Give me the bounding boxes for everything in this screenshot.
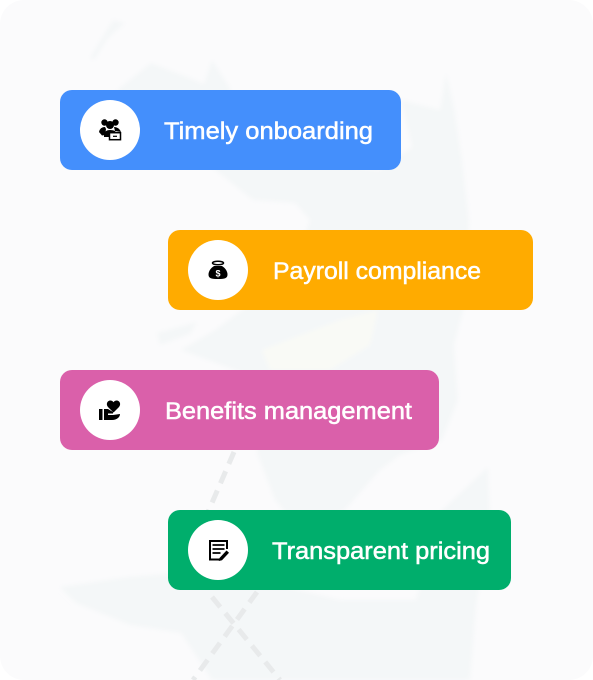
icon: hand holding heart bbox=[99, 400, 120, 420]
icon: money bag bbox=[208, 261, 228, 279]
card: Timely onboarding bbox=[60, 90, 401, 170]
faint map background bbox=[60, 20, 490, 680]
icon: money bag: $ bbox=[215, 268, 221, 278]
icon: team with briefcase bbox=[99, 119, 121, 140]
label: Timely onboarding bbox=[164, 118, 373, 145]
label: Benefits management bbox=[165, 398, 412, 425]
pale yellow highlight in map bbox=[262, 310, 378, 370]
label: Payroll compliance bbox=[273, 258, 481, 285]
card: Benefits management bbox=[60, 370, 439, 450]
card: Transparent pricing bbox=[168, 510, 511, 590]
icon: notepad with pencil bbox=[210, 541, 229, 561]
card: Payroll compliance bbox=[168, 230, 533, 310]
label: Transparent pricing bbox=[272, 538, 490, 565]
dashed route lines bbox=[193, 452, 280, 680]
